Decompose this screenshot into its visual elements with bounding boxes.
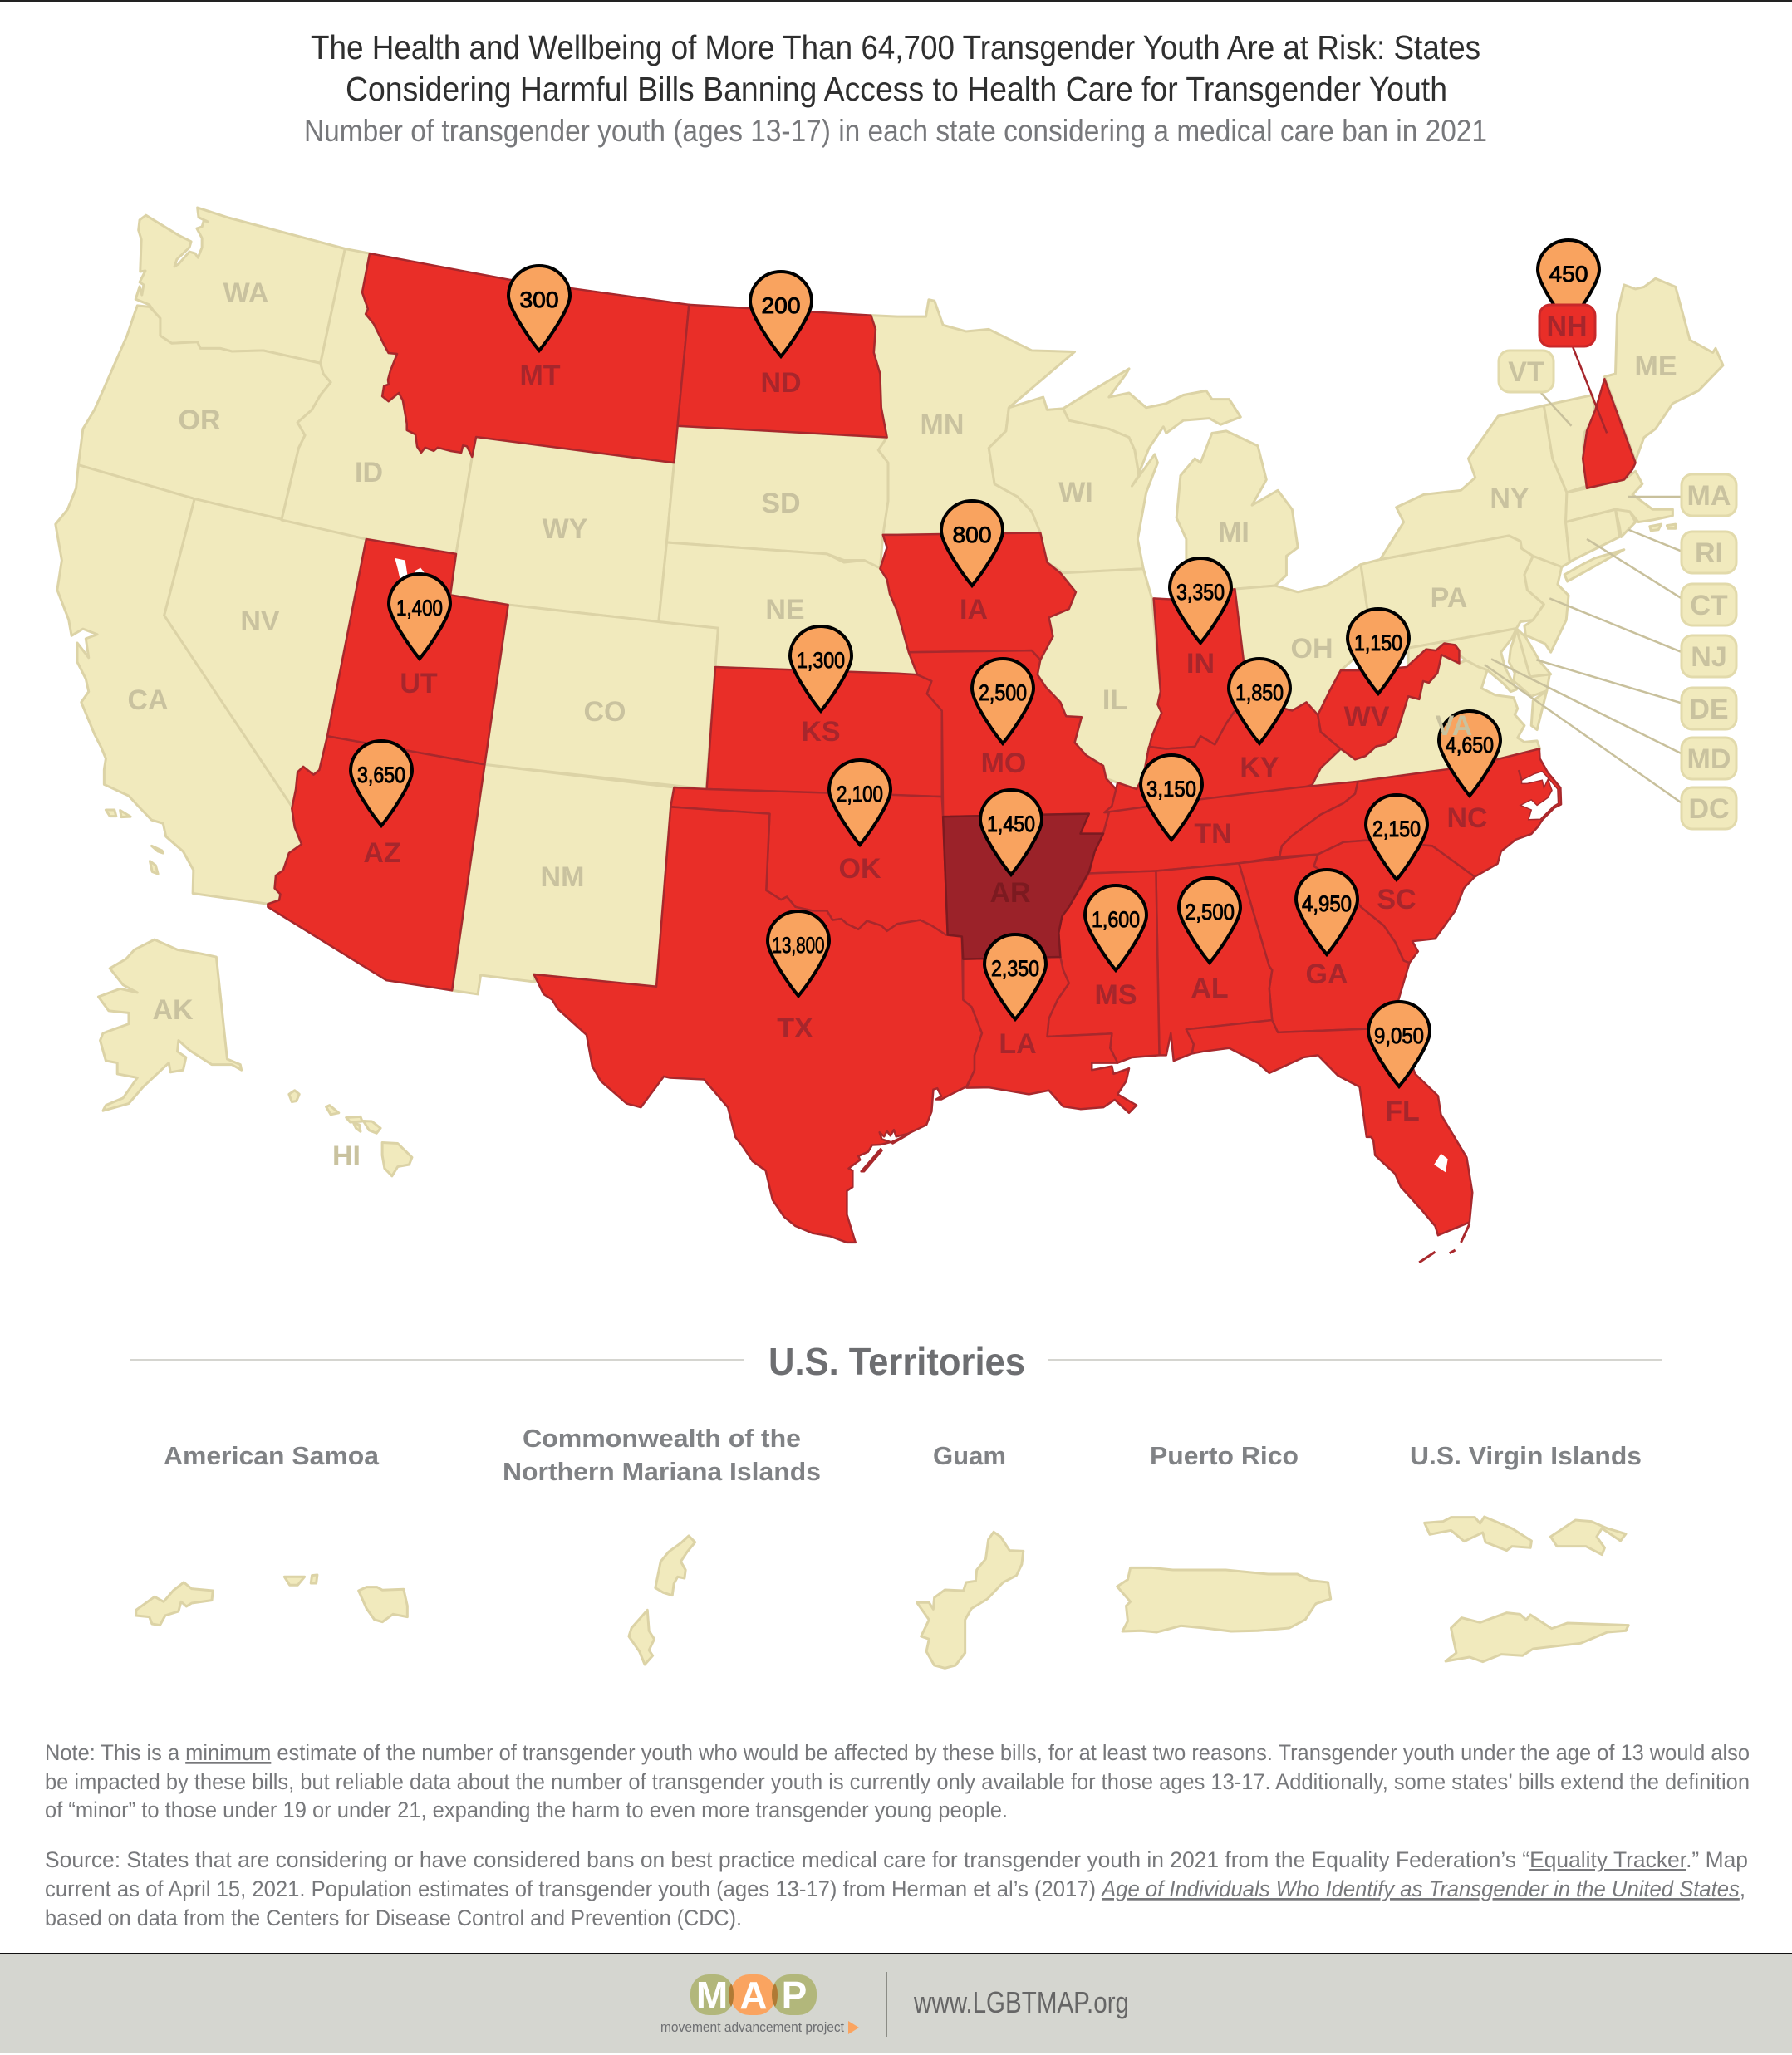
state abbreviations: AK	[152, 994, 194, 1026]
territory label: Guam: Guam	[933, 1441, 1006, 1470]
state abbreviations: CA	[127, 684, 169, 716]
state abbreviations: NV	[240, 606, 280, 637]
source text: Source: States that are considering or have considered bans on best practice medical care for transgender youth in 2021 from the Equality Federation’s “Equality Tracker.” Map	[45, 1847, 1748, 1872]
label box: RI: RI	[1695, 537, 1723, 569]
state abbreviations: SC	[1377, 884, 1416, 915]
lakes and sounds	[395, 558, 1559, 1263]
pin: IN	[1170, 558, 1231, 643]
logo: MAP: A	[739, 1974, 768, 2017]
non-ban states	[56, 208, 1723, 1176]
ban states	[268, 253, 1636, 1243]
state abbreviations: WV	[1344, 701, 1390, 733]
pin: GA: 4,950	[1302, 891, 1352, 916]
pin: AR	[980, 790, 1042, 875]
state abbreviations: TX	[777, 1013, 813, 1044]
label box: NH: NH	[1546, 311, 1588, 342]
pin: NC: 4,650	[1446, 733, 1494, 758]
state abbreviations: KY	[1240, 752, 1279, 783]
logo: MAP: M	[696, 1974, 728, 2017]
map: Northern Mariana Islands	[629, 1536, 695, 1665]
state abbreviations: FL	[1385, 1096, 1420, 1127]
pin: AR: 1,450	[987, 812, 1035, 836]
label box: MD	[1682, 738, 1736, 779]
state abbreviations: ID	[355, 457, 383, 488]
pin: SC: 2,150	[1372, 817, 1421, 841]
note text	[45, 1740, 1750, 1822]
pin: AZ: 3,650	[357, 763, 405, 787]
pin: OK	[829, 760, 891, 845]
pin: UT: 1,400	[396, 596, 443, 620]
label box: DC	[1682, 787, 1736, 829]
pin: IA	[941, 501, 1003, 586]
state abbreviations: LA	[999, 1028, 1037, 1060]
state abbreviations: IL	[1102, 684, 1127, 716]
note text: of “minor” to those under 19 or under 21, expanding the harm to even more transgender young people.	[45, 1798, 1008, 1822]
state abbreviations: MO	[981, 748, 1026, 779]
territory label: Puerto Rico: Puerto Rico	[1150, 1441, 1299, 1470]
label box: MA	[1682, 474, 1736, 516]
map: U.S. states	[56, 208, 1723, 1263]
pin: WV	[1348, 609, 1409, 694]
label box: DC: DC	[1688, 793, 1730, 825]
state abbreviations: OR	[178, 405, 221, 436]
label box: NJ: NJ	[1691, 641, 1727, 673]
state abbreviations: WI	[1058, 477, 1093, 508]
label box: CT: CT	[1690, 590, 1728, 621]
label box: DE: DE	[1689, 694, 1729, 725]
pin: AL	[1179, 878, 1240, 963]
pin: KY	[1229, 659, 1290, 743]
label box: MA: MA	[1687, 480, 1731, 512]
pin: OK: 2,100	[837, 782, 883, 807]
territory label: U.S. Virgin Islands: U.S. Virgin Islands	[1410, 1441, 1642, 1470]
state abbreviations: AR	[989, 877, 1031, 909]
pin: TN: 3,150	[1146, 777, 1196, 802]
pin: TN	[1141, 755, 1202, 840]
label box: VT	[1499, 351, 1554, 392]
pin: KY: 1,850	[1235, 680, 1284, 705]
pin: LA: 2,350	[991, 956, 1039, 981]
source text: current as of April 15, 2021. Population estimates of transgender youth (ages 13-17) from Herman et al’s (2017) Age of Individuals Who Identify as Transgender in the United States,	[45, 1876, 1745, 1901]
pin: IA: 800	[952, 522, 992, 547]
label box: NH	[1539, 305, 1595, 346]
pin: SC	[1366, 795, 1427, 880]
state abbreviations: SD	[761, 488, 801, 519]
state abbreviations: AZ	[363, 837, 401, 869]
state abbreviations: ME	[1635, 351, 1677, 382]
territory label: American Samoa: American Samoa	[164, 1441, 380, 1470]
state abbreviations: NE	[765, 594, 805, 625]
state abbreviations: CO	[583, 696, 626, 728]
leader lines	[1485, 346, 1683, 804]
label box: DE	[1682, 688, 1736, 729]
state abbreviations: MS	[1095, 979, 1137, 1011]
logo: MAP: movement advancement project	[660, 2019, 844, 2035]
state abbreviations: IN	[1186, 648, 1215, 679]
state abbreviations: AL	[1191, 973, 1229, 1004]
label box: VT: VT	[1508, 356, 1544, 388]
state abbreviations: MT	[519, 360, 561, 391]
state abbreviations: OH	[1291, 633, 1333, 665]
label box: NJ	[1682, 635, 1736, 677]
state abbreviations: NM	[541, 861, 584, 893]
website URL: www.LGBTMAP.org	[913, 1985, 1129, 2019]
note text: Note: This is a minimum estimate of the number of transgender youth who would be affected by these bills, for at least two reasons. Transgender youth under the age of 13 would also	[45, 1740, 1750, 1765]
pin: LA	[984, 934, 1046, 1019]
territory label: Northern Mariana Islands	[503, 1424, 821, 1486]
state abbreviations: OK	[839, 853, 881, 885]
label: VA: VA	[1436, 710, 1472, 742]
pin: MO	[972, 659, 1033, 743]
pin: GA	[1296, 870, 1358, 954]
state abbreviations: MI	[1218, 517, 1249, 548]
state abbreviations: KS	[801, 716, 841, 748]
pin: MS	[1085, 885, 1146, 970]
pin: TX	[768, 911, 829, 996]
label box: CT	[1682, 584, 1736, 625]
logo: MAP: P	[782, 1974, 807, 2017]
map: American Samoa	[136, 1575, 407, 1626]
source text: based on data from the Centers for Disease Control and Prevention (CDC).	[45, 1905, 742, 1930]
state abbreviations: PA	[1431, 582, 1467, 614]
source text	[45, 1847, 1748, 1930]
pin: WV: 1,150	[1354, 630, 1402, 655]
label box: MD: MD	[1687, 743, 1731, 775]
pin: ND: 200	[761, 293, 801, 318]
state abbreviations: NY	[1490, 483, 1529, 514]
pin: NC	[1439, 711, 1500, 796]
footer band	[0, 1953, 1792, 2053]
pin: ND	[750, 272, 812, 356]
subtitle: Number of transgender youth (ages 13-17) in each state considering a medical care ban in 2021	[304, 114, 1487, 148]
state abbreviations: GA	[1306, 959, 1348, 990]
title	[311, 28, 1480, 108]
label box: RI	[1682, 532, 1736, 573]
pin: UT	[389, 574, 450, 659]
pin: NH: 450	[1549, 262, 1588, 287]
state abbreviations: NC	[1446, 802, 1488, 834]
state abbreviations: ND	[760, 367, 802, 399]
state abbreviations: IA	[960, 594, 988, 625]
territory label: Northern Mariana Islands: Northern Mariana Islands	[503, 1457, 821, 1486]
pin: MT: 300	[520, 287, 558, 312]
pin: MT	[508, 266, 570, 351]
title: Considering Harmful Bills Banning Access to Health Care for Transgender Youth	[346, 70, 1447, 108]
logo: MAP	[660, 1974, 859, 2035]
pin: KS	[790, 626, 852, 711]
heading: U.S. Territories: U.S. Territories	[768, 1340, 1025, 1383]
pin: KS: 1,300	[797, 648, 845, 673]
state abbreviations: WY	[543, 513, 588, 545]
title: The Health and Wellbeing of More Than 64,700 Transgender Youth Are at Risk: States	[311, 28, 1480, 66]
state abbreviations: MN	[921, 409, 964, 440]
map: Guam	[917, 1532, 1024, 1668]
pin: AZ	[351, 741, 412, 826]
state abbreviations: UT	[400, 668, 438, 699]
territory label: Northern Mariana Islands: Commonwealth of the	[523, 1424, 801, 1453]
pin: IN: 3,350	[1176, 580, 1225, 605]
pin: FL: 9,050	[1374, 1023, 1424, 1048]
pin: MS: 1,600	[1092, 907, 1140, 932]
map: Puerto Rico	[1117, 1567, 1331, 1632]
state abbreviations: WA	[223, 277, 268, 309]
state abbreviations: HI	[332, 1140, 361, 1172]
pin: MO: 2,500	[979, 680, 1027, 705]
pin: FL	[1368, 1002, 1430, 1086]
pin: AL: 2,500	[1185, 900, 1235, 925]
pin: NH	[1538, 240, 1599, 325]
state abbreviations: TN	[1194, 818, 1232, 850]
pin: TX: 13,800	[773, 933, 824, 958]
map: U.S. Virgin Islands	[1425, 1517, 1628, 1662]
state abbreviations	[127, 277, 1677, 1172]
